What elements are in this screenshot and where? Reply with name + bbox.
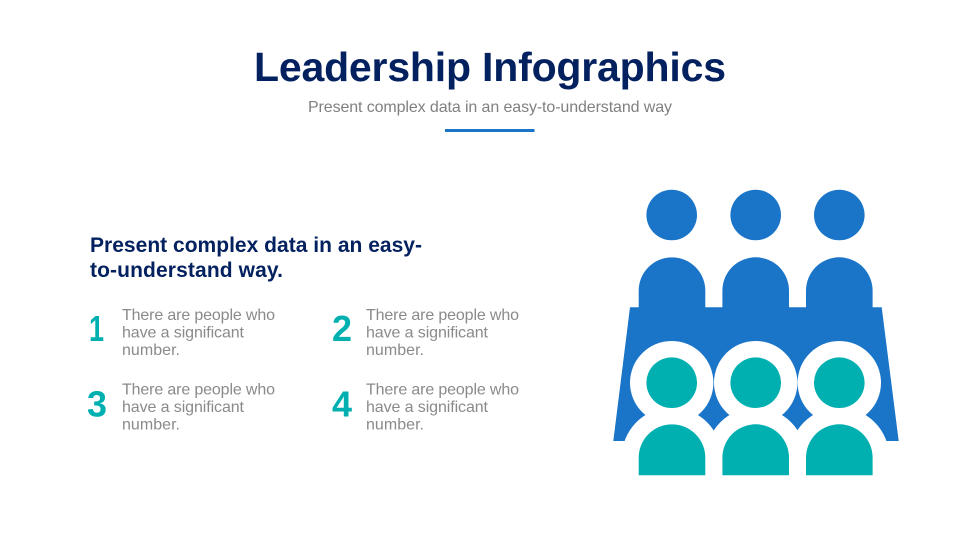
item 4 bbox=[332, 382, 519, 434]
front row heads bbox=[646, 357, 865, 408]
item 1: 1 bbox=[89, 308, 104, 349]
item 3 bbox=[87, 382, 275, 434]
front row bodies bbox=[639, 424, 873, 475]
item 1 bbox=[89, 307, 275, 359]
item 3: 3 bbox=[87, 384, 107, 424]
accent underline bbox=[445, 129, 534, 132]
item 2: number. bbox=[366, 342, 424, 359]
item 4: number. bbox=[366, 416, 424, 434]
title: Leadership Infographics bbox=[254, 44, 726, 90]
panel heading bbox=[90, 234, 422, 282]
back row bodies and table bbox=[613, 257, 899, 441]
left text panel bbox=[87, 234, 519, 434]
item 3: There are people who bbox=[122, 382, 275, 398]
item 2: There are people who bbox=[366, 307, 519, 324]
item 1: There are people who bbox=[122, 307, 275, 324]
item 1: number. bbox=[122, 342, 180, 359]
item 3: number. bbox=[122, 416, 180, 434]
item 4: There are people who bbox=[366, 382, 519, 398]
item 4: have a significant bbox=[366, 399, 489, 416]
item 3: have a significant bbox=[122, 399, 245, 416]
item 2: 2 bbox=[332, 308, 352, 349]
panel heading: to-understand way. bbox=[90, 259, 283, 282]
icon: leadership group of people bbox=[600, 190, 910, 508]
panel heading: Present complex data in an easy- bbox=[90, 234, 422, 257]
item 2 bbox=[332, 307, 519, 359]
item 4: 4 bbox=[332, 384, 352, 424]
white cut-outs behind front row bbox=[600, 341, 910, 508]
item 2: have a significant bbox=[366, 324, 489, 342]
subtitle: Present complex data in an easy-to-understand way bbox=[308, 99, 672, 116]
back row heads bbox=[646, 190, 865, 240]
item 1: have a significant bbox=[122, 324, 245, 342]
